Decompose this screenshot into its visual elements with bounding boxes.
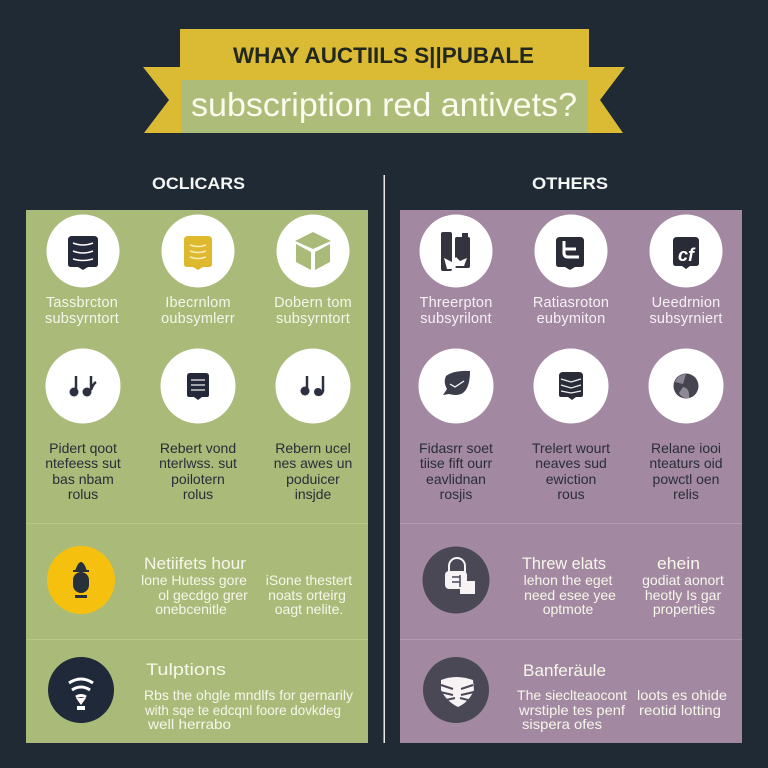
text: purple feature one	[522, 554, 724, 617]
text: card 5: Trelert wourt	[532, 440, 610, 456]
text: purple feature two: The sieclteaocont	[517, 687, 627, 703]
panel: green left	[26, 210, 368, 743]
title line two: subscription red antivets?	[191, 86, 577, 123]
text: card 6: relis	[673, 486, 699, 502]
icon: padlock hand	[422, 546, 490, 614]
text: green feature one: lone Hutess gore	[141, 572, 247, 588]
banner green band	[181, 80, 588, 133]
text: card 5: neaves sud	[535, 455, 607, 471]
text: green feature one: onebcenitle	[155, 601, 227, 617]
icon: pie sphere	[648, 348, 724, 424]
text: purple feature two: wrstiple tes penf	[518, 702, 625, 718]
text: green feature two: Tulptions	[146, 660, 226, 679]
text: purple feature two: loots es ohide	[637, 687, 727, 703]
text: card 4: tiise fift ourr	[420, 455, 493, 471]
icon: dark stack	[46, 214, 120, 288]
icon: leaf	[423, 657, 489, 723]
banner left ribbon tail	[143, 67, 181, 133]
icon: check bubble	[418, 348, 494, 424]
text: card 3: Ueedrnion	[652, 295, 720, 311]
text: purple feature one: ehein	[657, 554, 700, 573]
text: card 4: rosjis	[440, 486, 472, 502]
text: card 6: powctl oen	[653, 471, 719, 487]
text: purple feature two: reotid lotting	[639, 702, 721, 718]
text: card 4: Fidasrr soet	[419, 440, 493, 456]
icon: cf badge: cf	[678, 245, 696, 265]
text: card 5: ewiction	[546, 471, 596, 487]
icon: t badge	[534, 214, 608, 288]
text: card 3: Dobern tom	[274, 295, 352, 311]
text: purple feature one: lehon the eget	[524, 572, 612, 588]
text: card 6: Rebern ucel	[275, 440, 351, 456]
text: green feature one: Netiifets hour	[144, 554, 246, 573]
text: card 5: Rebert vond	[160, 440, 236, 456]
icon: green cube	[276, 214, 350, 288]
panel: purple right	[400, 210, 742, 743]
text: card 3: subsyrntort	[276, 311, 350, 327]
text: purple feature two: sispera ofes	[522, 716, 602, 732]
text: card 2: Ibecrnlom	[165, 295, 231, 311]
text: card 5: poilotern	[171, 471, 225, 487]
icon: music notes two	[276, 348, 350, 424]
icon: yellow microphone	[47, 546, 115, 614]
text: green feature two: with sqe te edcqnl foore dovkdeg	[144, 702, 341, 718]
icon: puzzle device	[420, 214, 492, 288]
text: card 6: Relane iooi	[651, 440, 721, 456]
text: green feature one	[141, 554, 352, 617]
text: green feature one: noats orteirg	[268, 587, 346, 603]
text: card 5: rolus	[183, 486, 213, 502]
banner yellow band	[180, 29, 589, 133]
text: card 5: nterlwss. sut	[159, 455, 237, 471]
text: green feature two: Rbs the ohgle mndlfs for gernarily	[144, 687, 353, 703]
text: card 4: rolus	[68, 486, 98, 502]
text: green feature two	[144, 660, 353, 732]
banner right ribbon tail	[588, 67, 625, 133]
text: card 3: subsyrniert	[649, 311, 723, 327]
text: card 6: nteaturs oid	[649, 455, 723, 471]
text: card 4: bas nbam	[52, 471, 114, 487]
text: card 4: eavlidnan	[426, 471, 486, 487]
text: card 1: subsyrntort	[45, 311, 119, 327]
icon: cf badge	[650, 214, 722, 288]
title line one: WHAY AUCTIILS S||PUBALE	[233, 43, 534, 68]
heading: right column: OTHERS	[532, 174, 608, 193]
text: purple feature one: godiat aonort	[642, 572, 724, 588]
text: purple feature one: properties	[653, 601, 715, 617]
text: card 6: poduicer	[286, 471, 340, 487]
text: green feature one: ol gecdgo grer	[158, 587, 248, 603]
text: card 2: eubymiton	[537, 311, 605, 327]
heading: left column: OCLICARS	[152, 174, 245, 193]
text: purple feature two	[517, 661, 727, 732]
icon: dark wifi	[48, 657, 114, 723]
text: purple feature one: need esee yee	[524, 587, 616, 603]
text: card 2: oubsymlerr	[161, 311, 235, 327]
icon: music notes	[46, 348, 120, 424]
text: card 5: rous	[557, 486, 585, 502]
text: card 1: Threerpton	[420, 295, 492, 311]
text: card 1: subsyrilont	[420, 311, 492, 327]
text: purple feature one: Threw elats	[522, 554, 606, 573]
text: card 6: insjde	[295, 486, 331, 502]
text: card 1: Tassbrcton	[46, 295, 118, 311]
text: purple feature one: heotly Is gar	[645, 587, 721, 603]
icon: dark stack small	[160, 348, 236, 424]
icon: yellow stack	[162, 214, 234, 288]
icon: dark stack	[534, 348, 608, 424]
title banner	[143, 29, 625, 133]
text: purple feature two: Banferäule	[523, 661, 606, 680]
text: purple feature one: optmote	[543, 601, 594, 617]
text: card 4: ntefeess sut	[45, 455, 121, 471]
text: green feature one: iSone thestert	[266, 572, 352, 588]
text: green feature one: oagt nelite.	[275, 601, 343, 617]
text: card 6: nes awes un	[274, 455, 352, 471]
text: green feature two: well herrabo	[147, 716, 231, 732]
text: card 2: Ratiasroton	[533, 295, 609, 311]
text: card 4: Pidert qoot	[49, 440, 117, 456]
